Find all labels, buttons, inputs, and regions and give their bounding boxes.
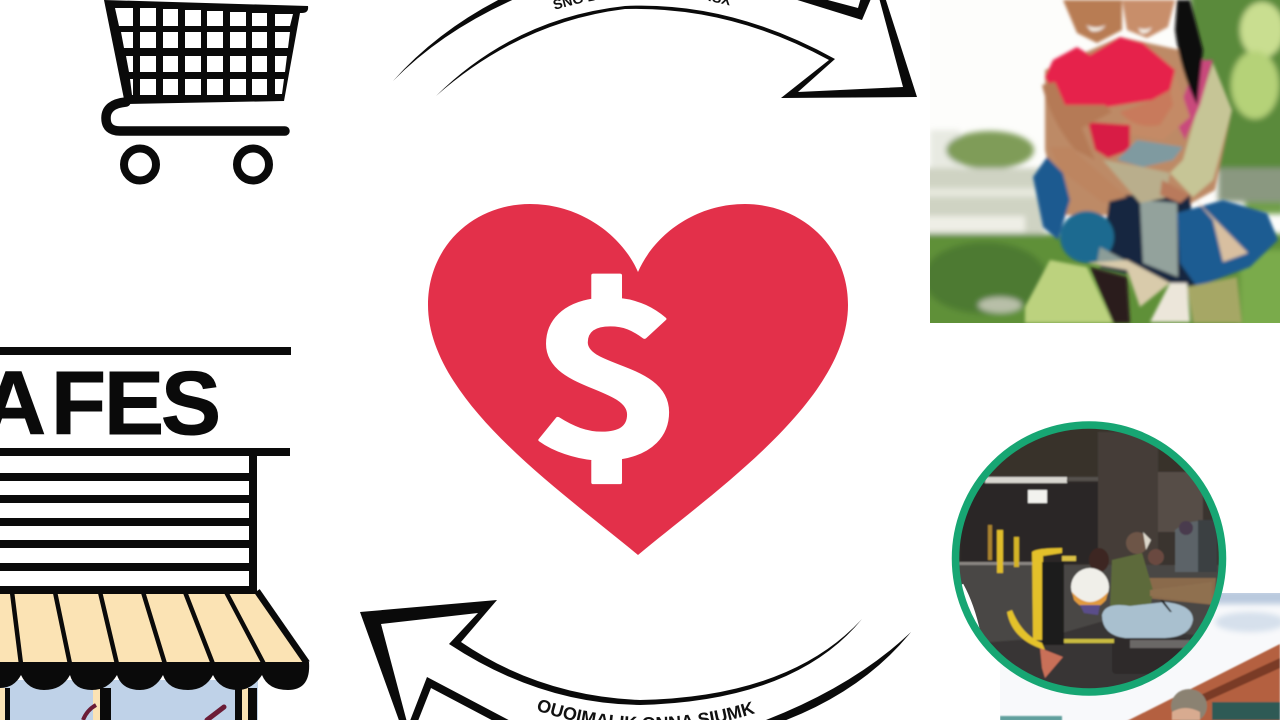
photo: couple on a bench — [920, 0, 1280, 334]
shop window — [0, 680, 258, 720]
arrow: bottom curved arrow — [360, 600, 911, 720]
arrow: top curved arrow — [393, 0, 917, 98]
heart with dollar sign — [428, 204, 848, 555]
photo: gym in green circle — [950, 420, 1230, 700]
striped awning — [0, 594, 306, 663]
figure base fill — [1045, 37, 1232, 215]
icon: shopping cart — [104, 0, 308, 180]
photo: rooftop and person, lower right — [1000, 590, 1280, 720]
shop storefront illustration — [0, 347, 309, 720]
dollar sign: $ — [528, 208, 685, 518]
